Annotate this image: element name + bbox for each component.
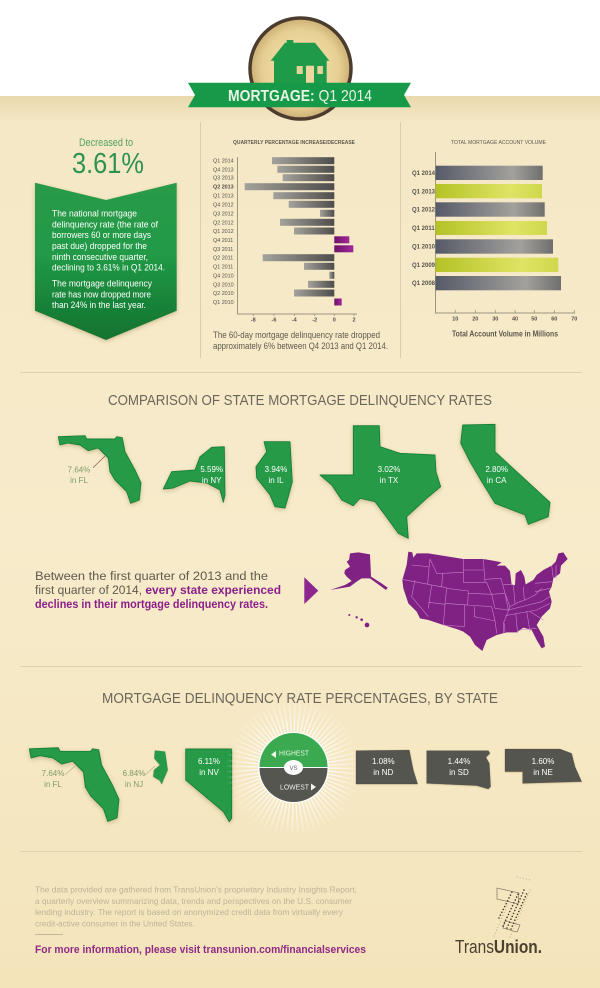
green chevron callout: delinquency rate (the rate of [52,219,158,229]
bar chart: quarterly change: Q4 2010 [213,273,234,279]
text: state declines statement: first quarter of 2014, every state experienced [35,583,281,597]
state: South Dakota: 1.44% [448,757,470,766]
versus badge: VS [289,766,298,772]
map: United States [330,552,568,651]
state: Nebraska: 1.60% [532,757,554,766]
bar chart: quarterly change: Q3 2013 [213,176,234,182]
text: state declines statement [35,569,281,611]
bar chart: quarterly change: -8 [251,318,256,324]
bar chart: quarterly change: Q1 2012 [213,229,234,235]
bar chart: quarterly change: Q1 2010 [213,300,234,306]
bar chart: account volume: Q1 2012 [412,208,436,214]
state: New Jersey [123,751,168,789]
icon: house [271,40,329,85]
state: Florida: 7.64% [68,466,90,475]
state: Texas: in TX [380,476,399,485]
green chevron callout: The national mortgage [52,209,137,219]
bar chart: account volume: 50 [531,316,537,322]
green chevron callout: past due) dropped for the [52,241,147,251]
green chevron callout: than 24% in the last year. [52,300,146,310]
state: Nevada [186,749,232,822]
axis title: Total Account Volume in Millions [452,330,558,339]
chart caption [213,330,388,351]
green chevron callout: rate has now dropped more [52,289,151,299]
section dividers [20,372,582,852]
chart caption: approximately 6% between Q4 2013 and Q1 2014. [213,341,388,351]
bar chart: account volume: 70 [571,316,577,322]
bar chart: account volume: Q1 2014 [412,171,436,177]
bar chart: quarterly change: 2 [352,318,356,324]
state: Nebraska: in NE [533,768,553,777]
chart title: QUARTERLY PERCENTAGE INCREASE/DECREASE [233,140,355,146]
state: Texas: 3.02% [378,465,400,474]
bar chart: account volume: Q1 2010 [412,244,436,250]
panel: total mortgage account volume [412,140,577,339]
bar chart: quarterly change: Q4 2012 [213,202,234,208]
green chevron callout: The mortgage delinquency [52,279,152,289]
bar chart: account volume: 40 [512,316,518,322]
header badge [188,18,411,119]
footer source note [35,884,357,934]
lowest half: LOWEST [280,782,309,792]
bar chart: account volume: Q1 2011 [412,226,435,232]
bar chart: account volume: 60 [551,316,557,322]
state: New Jersey: in NJ [125,780,143,789]
footer source note: The data provided are gathered from TransUnion's proprietary Industry Insights Report, [35,884,357,894]
heading: comparison of state rates: COMPARISON OF STATE MORTGAGE DELINQUENCY RATES [108,392,492,409]
column dividers [200,122,400,358]
state: Florida [58,436,141,503]
bar chart: quarterly change: Q1 2013 [213,194,234,200]
chart title: TOTAL MORTGAGE ACCOUNT VOLUME [451,140,546,146]
panel: lowest states [356,749,582,789]
state: Illinois [256,442,292,508]
state: Florida: in FL [44,780,62,789]
text: decreased to: Decreased to [79,137,133,149]
bar chart: quarterly change: Q3 2011 [213,247,233,253]
sunburst rays [242,716,344,818]
bar chart: quarterly change: Q1 2014 [213,159,234,165]
icon: purple arrow [304,577,318,604]
state: New York: in NY [202,476,222,485]
bar chart: quarterly change: Q4 2011 [213,238,233,244]
highest versus lowest dial [242,716,344,818]
bar chart: account volume [412,152,577,322]
bar chart: quarterly change: Q2 2012 [213,220,234,226]
Alaska [330,552,388,590]
state: South Dakota: in SD [449,768,469,777]
bar chart: quarterly change: -4 [292,318,298,324]
bar chart: quarterly change: Q3 2012 [213,211,234,217]
bar chart: account volume: 20 [472,316,478,322]
Hawaii [348,614,369,627]
state: Florida: 7.64% [42,769,64,778]
logo mark [494,877,531,937]
green chevron callout: declining to 3.61% in Q1 2014. [52,263,165,273]
contiguous states [402,552,568,651]
bar chart: quarterly change: Q2 2010 [213,291,234,297]
state: Nevada: 6.11% [198,757,220,766]
state: New York: 5.59% [200,465,223,474]
state: North Dakota: 1.08% [372,757,395,766]
chart caption: The 60-day mortgage delinquency rate dropped [213,330,380,340]
green chevron callout [35,183,177,340]
bar chart: account volume: Q1 2009 [412,263,436,269]
state: Florida: in FL [70,476,88,485]
panel: quarterly percentage chart [213,140,388,351]
footer source note: a quarterly overview summarizing data, trends and perspectives on the U.S. consumer [35,896,352,906]
bar chart: quarterly change: -6 [272,318,276,324]
state: Illinois: 3.94% [265,465,287,474]
ribbon title: MORTGAGE: Q1 2014 [228,88,372,105]
highest half: HIGHEST [279,748,309,758]
state: North Dakota [356,750,418,784]
text: state declines statement: Between the first quarter of 2013 and the [35,569,268,583]
bar chart: account volume: 30 [492,316,498,322]
state: California: in CA [487,476,507,485]
footer source note: lending industry. The report is based on anonymized credit data from virtually every [35,907,344,917]
state: North Dakota: in ND [373,768,394,777]
state: Texas [320,426,441,538]
state: Florida [29,748,119,821]
bar chart: quarterly change: Q2 2013 [213,185,234,191]
bar chart: quarterly change: Q4 2013 [213,167,234,173]
footer link: For more information, please visit transunion.com/financialservices [35,944,366,956]
heading: rate percentages by state: MORTGAGE DELINQUENCY RATE PERCENTAGES, BY STATE [102,690,498,707]
bar chart: quarterly change [213,157,357,324]
panel: highest states [29,748,232,822]
TransUnion logo [455,877,542,957]
bar chart: account volume: 10 [452,316,458,322]
bar chart: account volume: Q1 2013 [412,189,436,195]
state: California: 2.80% [485,465,508,474]
state: Illinois: in IL [268,476,284,485]
state: Nebraska [505,749,582,783]
bar chart: account volume: Q1 2008 [412,281,436,287]
ribbon title [188,83,411,107]
bar chart: quarterly change: Q2 2011 [213,256,233,262]
green chevron callout: borrowers 60 or more days [52,230,151,240]
bar chart: quarterly change: Q1 2011 [213,264,233,270]
state: Nevada: in NV [199,768,219,777]
big number: 3.61% [72,148,144,180]
bar chart: quarterly change: Q3 2010 [213,282,234,288]
panel: national delinquency rate [35,137,177,340]
panel: state comparison maps [58,424,550,538]
footer source note: credit-active consumer in the United States. [35,918,195,928]
state: New Jersey: 6.84% [123,769,145,778]
state: California [461,424,550,524]
green chevron callout: ninth consecutive quarter, [52,252,148,262]
logo wordmark: TransUnion. [455,937,542,957]
bar chart: quarterly change: 0 [333,318,336,324]
bar chart: quarterly change: -2 [312,318,317,324]
text: state declines statement: declines in their mortgage delinquency rates. [35,597,268,611]
state: South Dakota [427,751,491,789]
medallion [250,18,351,119]
state: New York [163,447,225,502]
